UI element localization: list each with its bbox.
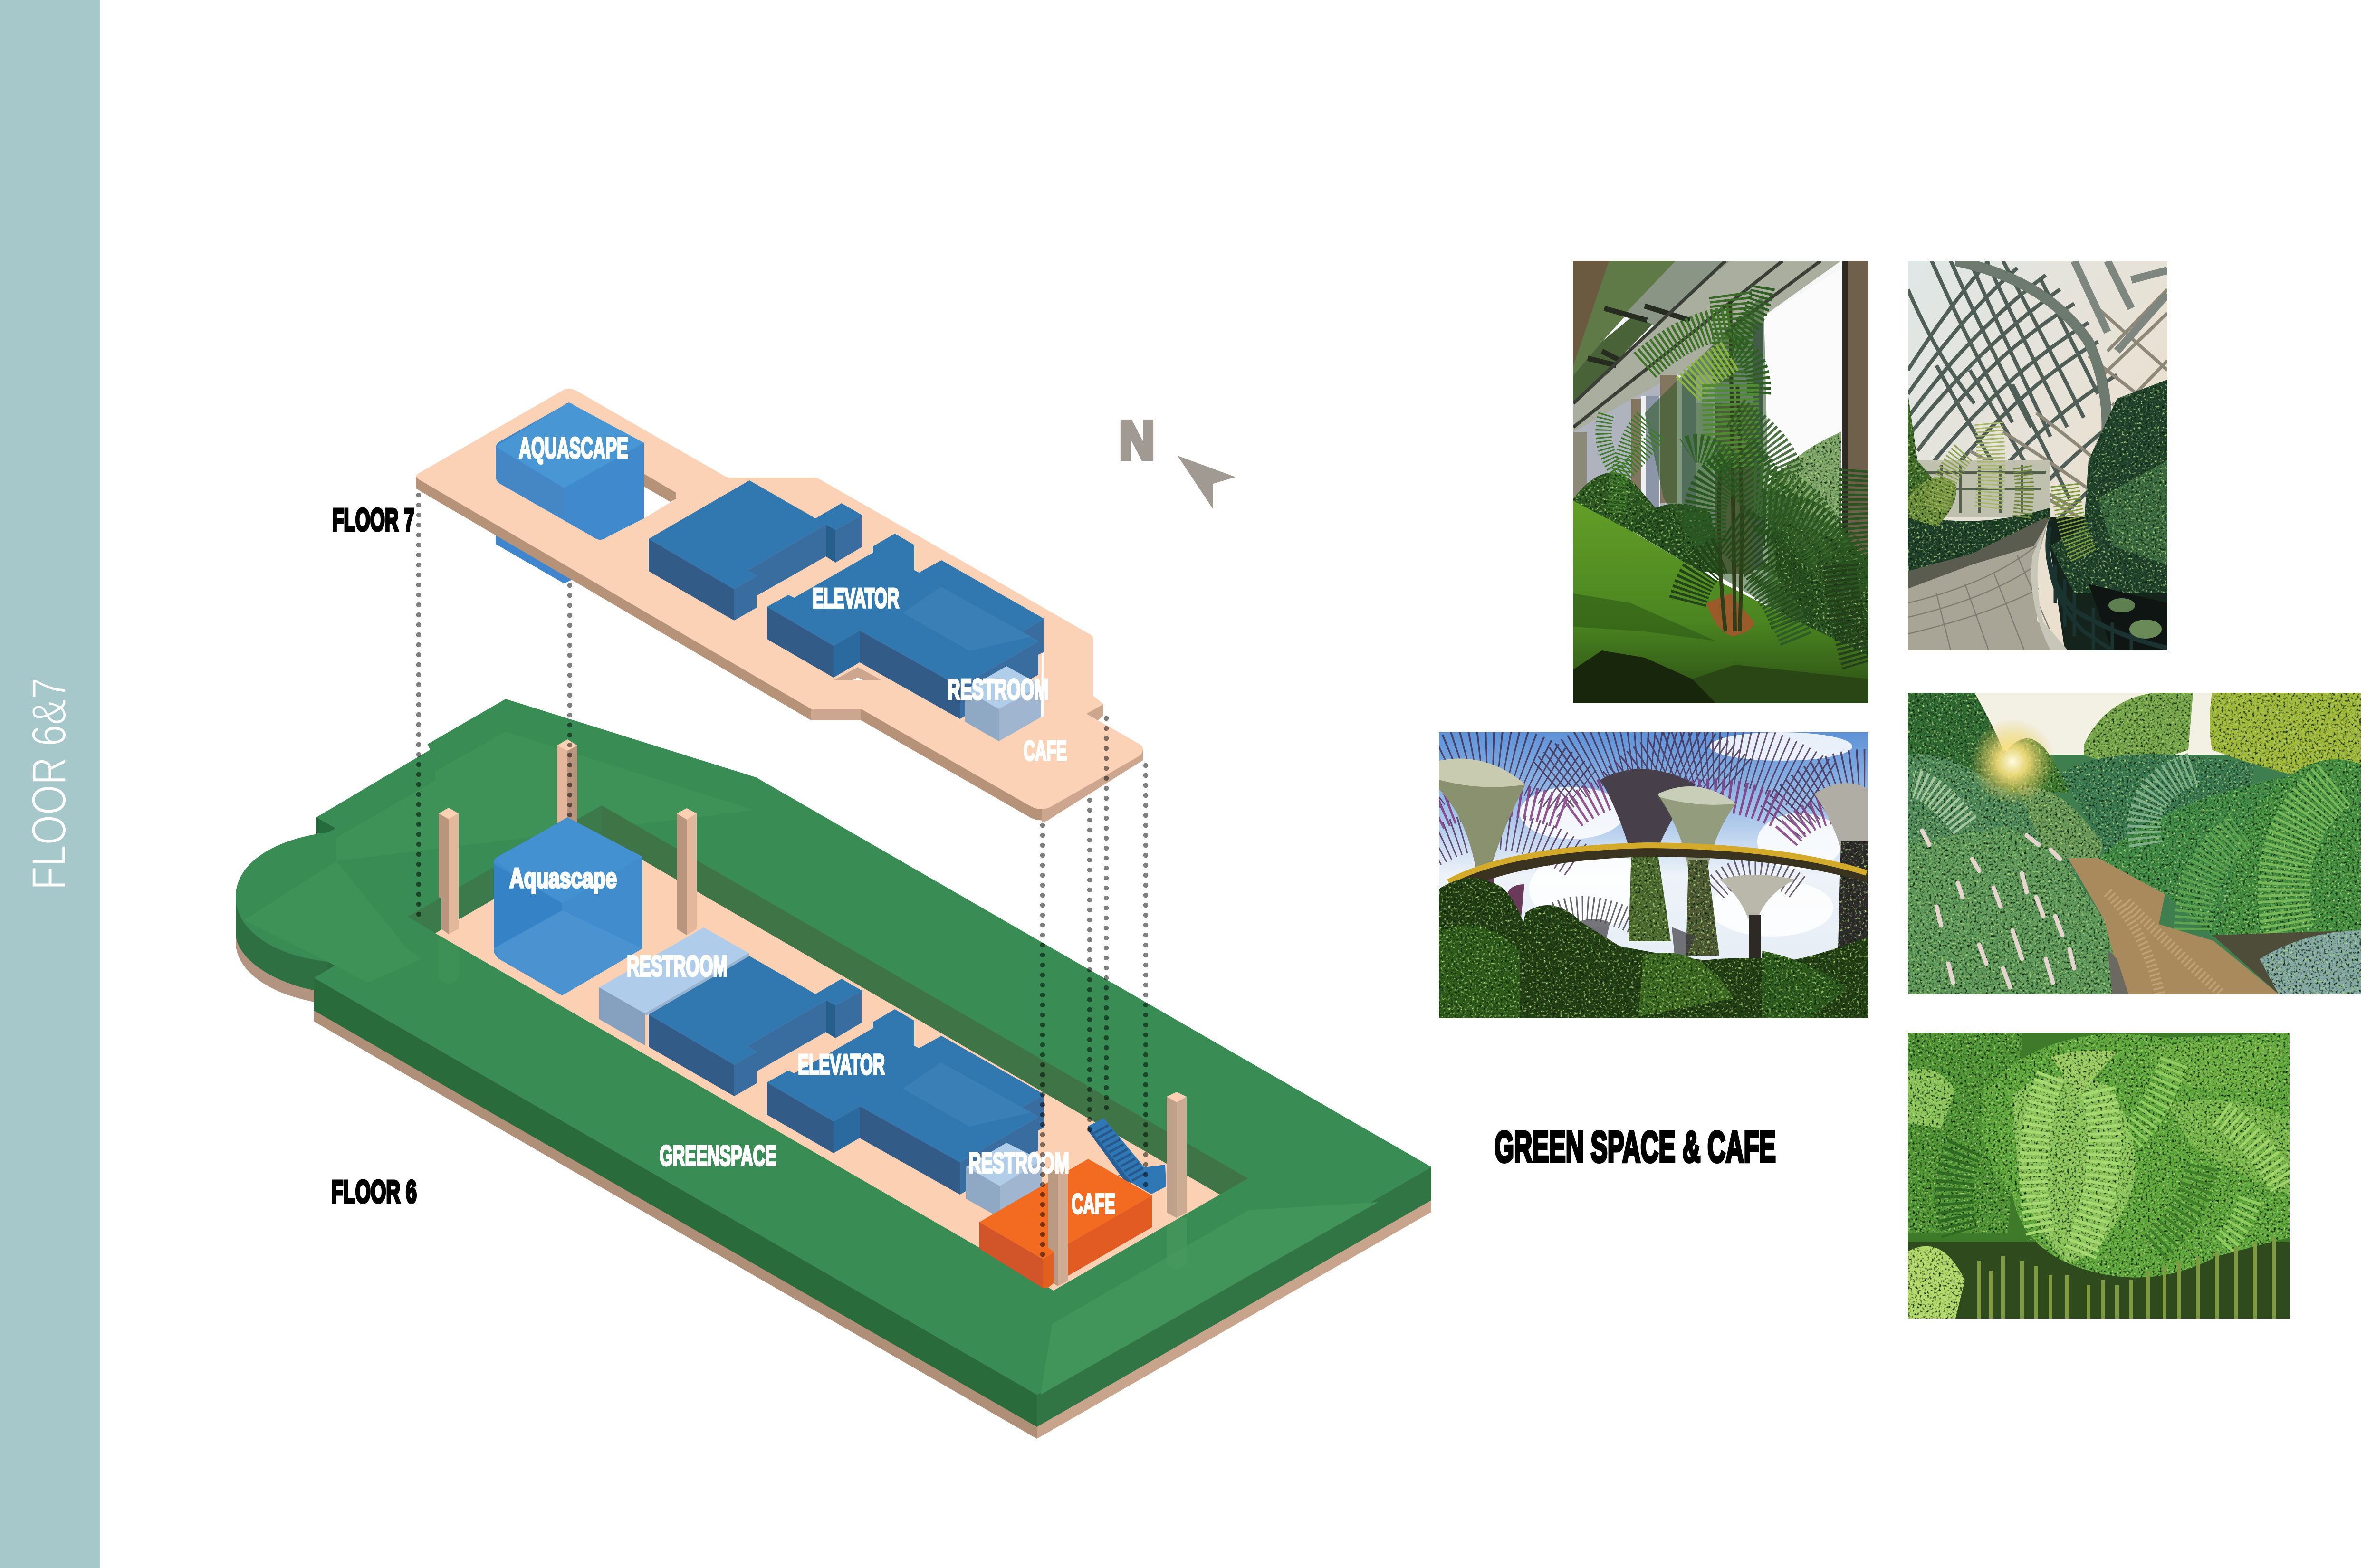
label: elevator floor 6: ELEVATOR xyxy=(798,1049,885,1080)
photo: palm atrium xyxy=(1573,261,1868,703)
staircase xyxy=(1088,1118,1166,1194)
label: elevator floor 7: ELEVATOR xyxy=(813,583,899,614)
column: front centre xyxy=(1048,1167,1068,1286)
elevator blocks floor 7 xyxy=(649,480,1044,719)
foliage xyxy=(1439,878,1868,1018)
label: restroom floor 7: RESTROOM xyxy=(948,673,1049,706)
tree canopies xyxy=(1410,744,1895,922)
cafe front corner xyxy=(1043,1252,1054,1288)
restroom block floor 7 xyxy=(965,666,1041,741)
cafe block xyxy=(979,1159,1152,1288)
label: cafe floor 7: CAFE xyxy=(1024,736,1067,766)
aquascape block floor 7 xyxy=(496,402,644,540)
floor 7 slab side xyxy=(416,476,1143,822)
dotted connector lines xyxy=(419,495,1146,1257)
label: cafe floor 6: CAFE xyxy=(1072,1188,1115,1220)
trunks xyxy=(1473,868,1494,906)
label: restroom floor 6: RESTROOM xyxy=(627,950,728,982)
label: floor 6: FLOOR 6 xyxy=(331,1174,417,1210)
floor 6 inner walls xyxy=(408,805,1248,1195)
photo: bamboo foliage xyxy=(1908,1033,2290,1319)
floor 6 green space top xyxy=(236,699,1431,1395)
sidebar panel xyxy=(0,0,100,1568)
north indicator xyxy=(1119,411,1236,509)
restroom block floor 6 xyxy=(599,927,749,1045)
floor 7 light well xyxy=(644,474,676,518)
distant trees xyxy=(1501,913,1696,975)
elevator blocks floor 6 xyxy=(649,956,1044,1195)
floor 6 base slab sides xyxy=(236,817,1431,1439)
bridge xyxy=(1448,847,1867,894)
restroom block back floor 6 xyxy=(966,1143,1042,1218)
column: back right xyxy=(677,808,697,935)
photo: ornamental grass path xyxy=(1908,691,2361,994)
heading: green space and cafe: GREEN SPACE & CAFE xyxy=(1495,1123,1776,1171)
label: greenspace: GREENSPACE xyxy=(660,1140,776,1172)
aquascape block floor 6 xyxy=(494,817,642,995)
floor 6 peach floor xyxy=(435,836,1220,1291)
label: aquascape floor 7: AQUASCAPE xyxy=(519,432,628,465)
column: front right xyxy=(1167,1092,1187,1218)
floor 6 plan xyxy=(236,699,1431,1439)
label: Aquascape floor 6: Aquascape xyxy=(509,863,617,894)
floor 7 slab top xyxy=(416,389,1143,809)
column: back left xyxy=(439,808,459,934)
floor 7 plan xyxy=(416,389,1143,822)
hanging fronds xyxy=(1954,1061,2283,1256)
photo: glass greenhouse xyxy=(1908,261,2167,650)
sidebar title: FLOOR 6&7 xyxy=(22,678,76,890)
label: floor 7: FLOOR 7 xyxy=(332,502,414,538)
north arrow xyxy=(1178,456,1236,509)
label: restroom back floor 6: RESTROOM xyxy=(968,1147,1069,1179)
floor 7 notch xyxy=(799,508,1044,717)
photo: supertrees xyxy=(1410,732,1895,1018)
north letter: N xyxy=(1119,411,1155,471)
column: back centre xyxy=(557,739,577,836)
funnels xyxy=(1439,759,1525,875)
aquascape tail under floor 7 xyxy=(496,532,573,583)
